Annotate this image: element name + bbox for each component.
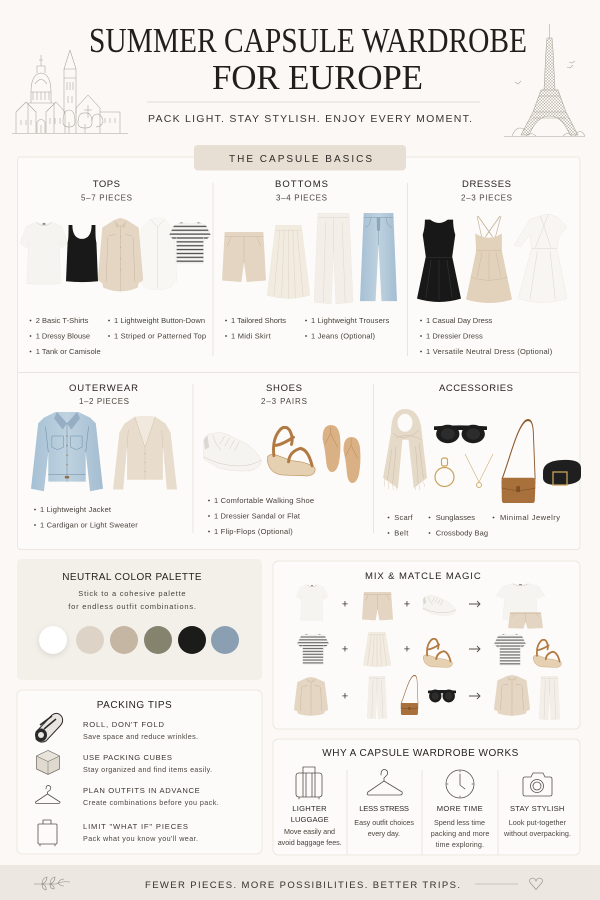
- list: bottoms: 1 Lightweight Trousers: [311, 316, 390, 325]
- benefit: lighter luggage: LIGHTER: [292, 804, 327, 813]
- list: accessories: Sunglasses: [436, 513, 475, 522]
- icon: heart: [530, 878, 542, 890]
- outfit row 2: +: [342, 644, 348, 656]
- list: dresses: [420, 316, 553, 356]
- palette description: for endless outfit combinations.: [68, 602, 196, 611]
- subtitle: PACK LIGHT. STAY STYLISH. ENJOY EVERY MOMENT.: [148, 113, 472, 125]
- panel: neutral color palette: NEUTRAL COLOR PALETTE: [62, 572, 202, 583]
- panel: packing tips: PACKING TIPS: [97, 700, 172, 711]
- tip 3: Create combinations before you pack.: [83, 798, 219, 807]
- list: accessories: Minimal Jewelry: [500, 513, 560, 522]
- section heading pill: [194, 145, 406, 170]
- title: SUMMER CAPSULE WARDROBE: [89, 21, 527, 60]
- benefit: stay stylish: [503, 773, 571, 838]
- list: accessories: Belt: [394, 528, 409, 538]
- illustration: Eiffel Tower: [504, 24, 585, 136]
- tip 4: [83, 822, 198, 843]
- list: shoes: 1 Flip-Flops (Optional): [214, 527, 293, 536]
- palette description: [68, 589, 196, 611]
- tip 1: Save space and reduce wrinkles.: [83, 732, 198, 741]
- column: outerwear: 1–2 PIECES: [79, 397, 129, 406]
- tip 1: [83, 720, 198, 741]
- benefit: more time: packing and more: [431, 829, 489, 838]
- panel: why a capsule wardrobe works: WHY A CAPSULE WARDROBE WORKS: [322, 748, 519, 759]
- list: tops: 1 Tank or Camisole: [36, 347, 101, 356]
- clothing: outerwear: [31, 412, 177, 491]
- column: dresses: 2–3 PIECES: [461, 194, 512, 202]
- column: tops: TOPS: [93, 179, 120, 190]
- icon: leaf sprig: [34, 877, 70, 890]
- outfit row 3: +: [342, 690, 348, 702]
- outfit row 3: [294, 675, 560, 720]
- shoes illustrations: [204, 425, 360, 483]
- tip 4: LIMIT "WHAT IF" PIECES: [83, 822, 188, 831]
- benefit: more time: MORE TIME: [437, 804, 483, 813]
- tip 2: USE PACKING CUBES: [83, 753, 172, 762]
- list: shoes: [208, 496, 314, 536]
- icon: rolled clothes: [35, 713, 63, 742]
- column: bottoms: 3–4 PIECES: [276, 194, 327, 202]
- icon: hanger: [35, 785, 60, 804]
- tip 2: [83, 753, 212, 774]
- column: outerwear: [31, 383, 177, 530]
- list: outerwear: 1 Cardigan or Light Sweater: [40, 520, 138, 530]
- column: shoes: SHOES: [266, 383, 302, 394]
- list: bottoms: [225, 316, 390, 340]
- clothing: tops: [20, 217, 211, 291]
- column: bottoms: BOTTOMS: [275, 179, 328, 190]
- clothing: dresses: [417, 214, 567, 303]
- divider rule under title: [147, 102, 480, 103]
- benefit: lighter luggage: Move easily and: [284, 827, 335, 836]
- tip 3: PLAN OUTFITS IN ADVANCE: [83, 786, 200, 795]
- benefit: stay stylish: STAY STYLISH: [510, 804, 564, 813]
- footer banner: FEWER PIECES. MORE POSSIBILITIES. BETTER TRIPS.: [145, 880, 460, 891]
- outfit row 1: +: [404, 598, 410, 610]
- tip 4: Pack what you know you'll wear.: [83, 834, 198, 843]
- benefit: lighter luggage: [278, 767, 342, 847]
- icon: packing cube: [36, 750, 60, 774]
- icon: suitcase: [38, 820, 57, 846]
- list: tops: 2 Basic T-Shirts: [36, 316, 89, 325]
- divider line: [475, 883, 518, 885]
- list: dresses: 1 Versatile Neutral Dress (Optional): [426, 347, 553, 356]
- panel: packing tips: [17, 690, 262, 854]
- list: outerwear: 1 Lightweight Jacket: [40, 505, 112, 514]
- outfit row 2: +: [404, 644, 410, 656]
- outfit row 1: +: [342, 598, 348, 610]
- tip 1: ROLL, DON'T FOLD: [83, 720, 165, 729]
- footer banner: [0, 865, 600, 900]
- list: shoes: 1 Dressier Sandal or Flat: [214, 512, 301, 520]
- list: bottoms: 1 Jeans (Optional): [311, 332, 376, 340]
- column: dresses: DRESSES: [462, 179, 511, 190]
- benefit: more time: time exploring.: [436, 840, 484, 849]
- benefit: less stress: LESS STRESS: [359, 804, 409, 813]
- benefit: stay stylish: without overpacking.: [503, 829, 571, 838]
- list: bottoms: 1 Midi Skirt: [231, 332, 272, 340]
- panel: mix and match: [273, 561, 580, 729]
- list: tops: 1 Striped or Patterned Top: [114, 332, 206, 340]
- panel: mix and match: MIX & MATCLE MAGIC: [365, 571, 481, 582]
- list: bottoms: 1 Tailored Shorts: [231, 316, 286, 325]
- tip 2: Stay organized and find items easily.: [83, 765, 212, 774]
- tip 3: [83, 786, 219, 807]
- color swatches: [39, 626, 239, 654]
- list: dresses: 1 Casual Day Dress: [426, 316, 493, 325]
- benefit: stay stylish: Look put-together: [509, 818, 567, 827]
- panel: why a capsule wardrobe works: [273, 739, 580, 855]
- benefit: lighter luggage: avoid baggage fees.: [278, 838, 342, 847]
- title: [89, 21, 527, 97]
- column: shoes: 2–3 PAIRS: [261, 397, 307, 406]
- benefit: more time: [431, 770, 489, 849]
- section heading pill: THE CAPSULE BASICS: [229, 154, 372, 165]
- benefit: less stress: [354, 769, 414, 838]
- list: shoes: 1 Comfortable Walking Shoe: [214, 496, 314, 505]
- panel: the capsule basics: [18, 145, 581, 550]
- column: accessories: [383, 383, 581, 538]
- title: FOR EUROPE: [212, 58, 423, 97]
- benefit: less stress: Easy outfit choices: [354, 818, 414, 827]
- benefit: less stress: every day.: [368, 829, 400, 838]
- column: tops: 5–7 PIECES: [81, 194, 132, 202]
- column: outerwear: OUTERWEAR: [69, 383, 138, 394]
- illustration: European cityscape: [12, 50, 128, 134]
- outfit row 2: [297, 632, 561, 667]
- list: outerwear: [34, 505, 138, 530]
- list: tops: 1 Lightweight Button-Down: [114, 316, 205, 325]
- list: accessories: [388, 513, 560, 538]
- list: dresses: 1 Dressier Dress: [426, 332, 483, 340]
- column: bottoms: [222, 179, 397, 340]
- panel: neutral color palette: [17, 559, 262, 680]
- column: shoes: [204, 383, 360, 536]
- list: tops: [30, 316, 206, 356]
- palette description: Stick to a cohesive palette: [78, 589, 186, 598]
- column: dresses: [417, 179, 567, 356]
- list: accessories: Crossbody Bag: [436, 528, 488, 538]
- accessories illustrations: [383, 409, 581, 503]
- list: accessories: Scarf: [394, 513, 414, 522]
- benefit: more time: Spend less time: [434, 818, 485, 827]
- column: tops: [20, 179, 211, 356]
- benefit: lighter luggage: LUGGAGE: [291, 815, 329, 824]
- clothing: bottoms: [222, 213, 397, 304]
- outfit row 1: [296, 584, 545, 629]
- column: accessories: ACCESSORIES: [439, 383, 513, 394]
- list: tops: 1 Dressy Blouse: [36, 332, 90, 340]
